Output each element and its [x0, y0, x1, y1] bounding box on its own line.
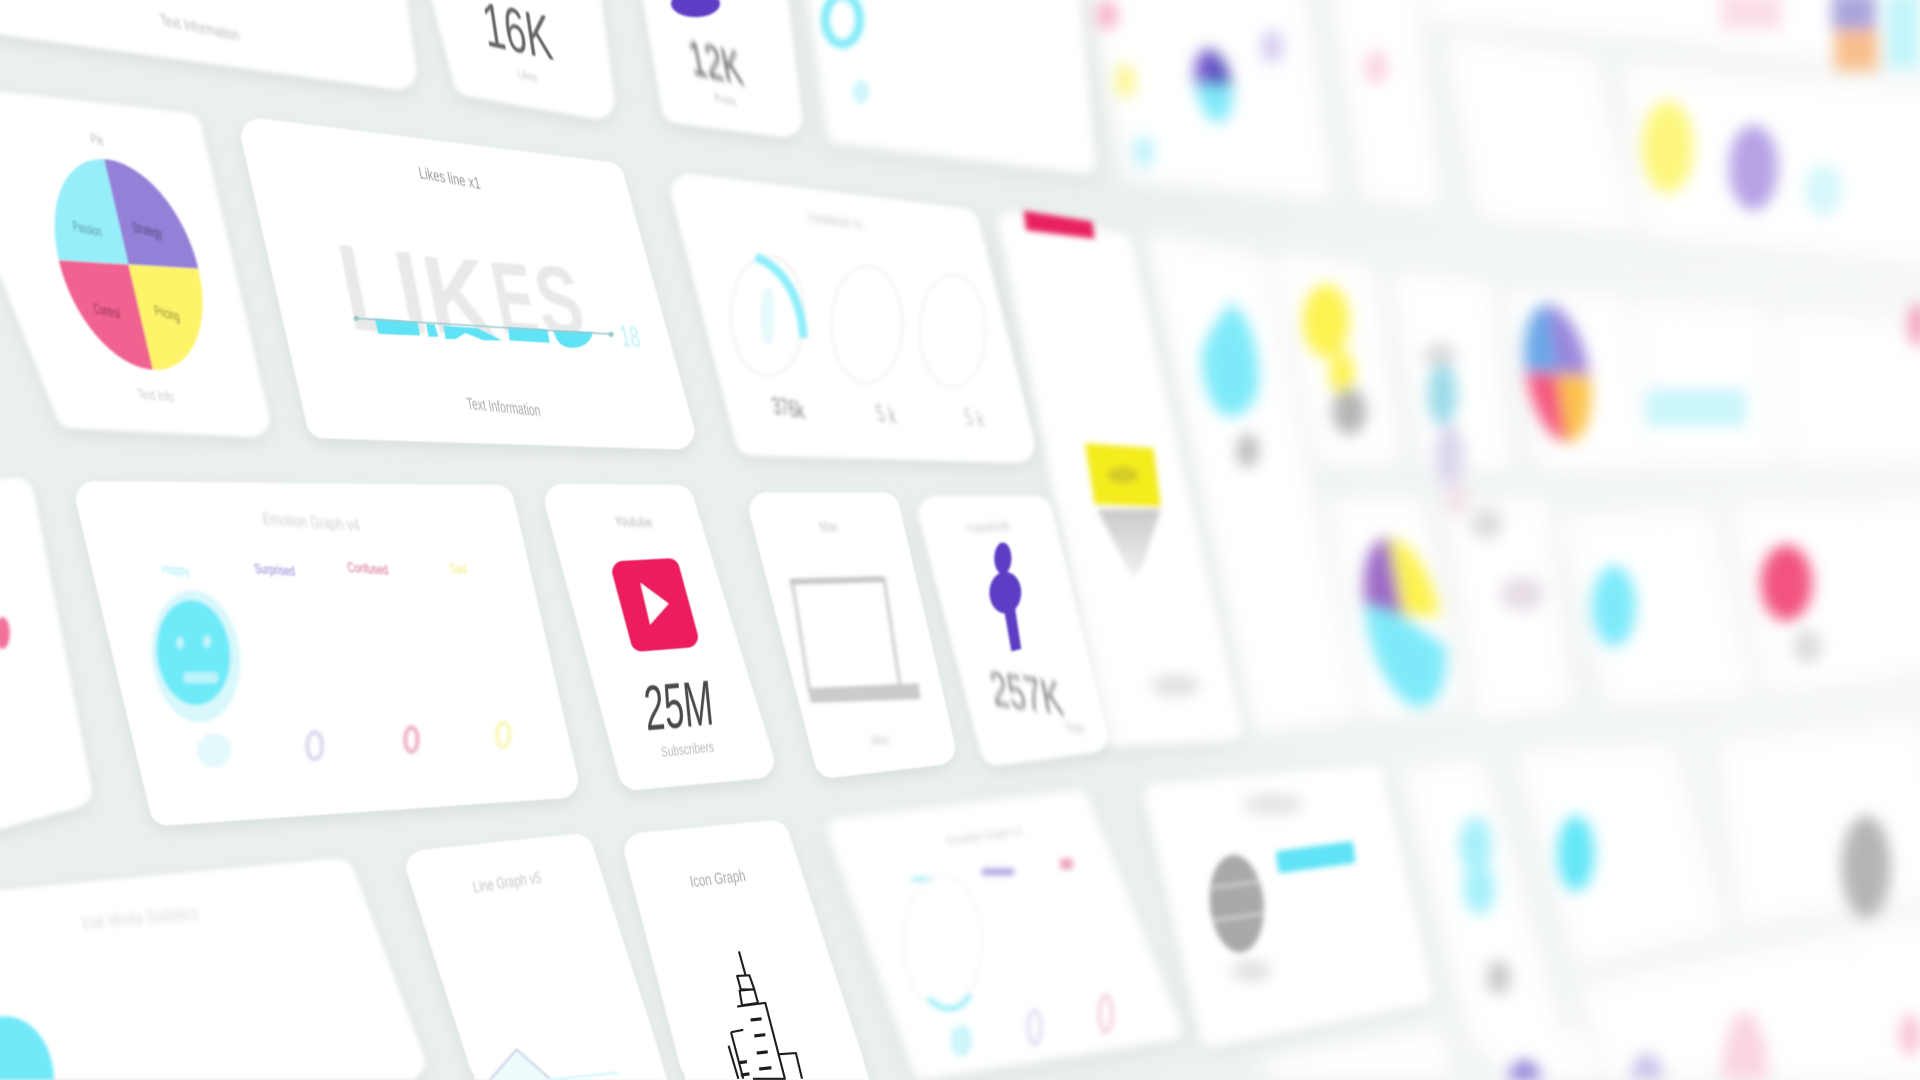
- 257K number: 257K: [985, 660, 1068, 726]
- cyan pill bar: [1278, 844, 1353, 871]
- ring charts: 376k: [770, 392, 807, 425]
- LIKES word: K: [414, 233, 502, 361]
- 12K caption: Posts: [713, 92, 738, 109]
- emotion legend: [160, 560, 468, 579]
- atmospheric wash over far cards: [1078, 0, 1920, 1080]
- 16K caption: Likes: [516, 67, 538, 85]
- top left caption: Text Information: [158, 10, 241, 44]
- likes card title: Likes line x1: [417, 163, 482, 193]
- pie chart: Pie: [89, 130, 105, 149]
- red label chip: [1024, 211, 1095, 239]
- emotion legend: Confused: [346, 560, 389, 578]
- emoji face: [145, 586, 247, 727]
- top ring icon: [825, 0, 869, 104]
- in-focus cards: [94, 137, 937, 1080]
- emotion graph v2 card content: Emotion Graph v1: [945, 822, 1024, 849]
- emotion graph title: Emotion Graph v4: [261, 509, 362, 536]
- card captions out of focus: Facebook: [966, 519, 1011, 536]
- ring charts: 5 k: [962, 403, 987, 434]
- small left card caption: Social Media Statistics: [67, 903, 200, 935]
- facebook icon: [989, 542, 1021, 651]
- subscribers caption: Subscribers: [660, 739, 715, 760]
- 25M number: 25M: [641, 666, 716, 744]
- LIKES word: E: [483, 241, 547, 359]
- card captions out of focus: [807, 209, 1086, 749]
- 12K number: 12K: [684, 30, 747, 96]
- mid blurred cards: [814, 0, 1420, 1068]
- likes caption: Text Information: [465, 395, 542, 420]
- yellow callout with grey tail: [1085, 443, 1161, 578]
- emotion legend: Happy: [160, 562, 191, 579]
- likes cyan bar: [375, 318, 593, 348]
- icon graph title: Icon Graph: [688, 866, 747, 891]
- left card pink fragment: [0, 617, 10, 649]
- pie chart: Pricing: [153, 302, 181, 325]
- card captions out of focus: Mac: [870, 731, 891, 749]
- line graph title: Line Graph v5: [471, 868, 543, 896]
- line graph chart: [490, 1049, 618, 1080]
- LIKES word: S: [526, 244, 592, 356]
- icon: youtube play button: [623, 569, 687, 640]
- emotion legend: Sad: [449, 561, 468, 577]
- emotion legend: Surprised: [253, 561, 296, 579]
- pie chart: Passion: [71, 217, 103, 241]
- LIKES word: I: [384, 225, 437, 359]
- soft blurred cards: [0, 0, 1090, 1080]
- pie chart: [34, 130, 223, 406]
- ring charts: [731, 256, 987, 434]
- likes line with end dots: [354, 316, 614, 337]
- far blurred chart colours: [1097, 0, 1920, 1080]
- far blurred card wall: [1093, 0, 1920, 1068]
- pie chart: Control: [92, 300, 122, 322]
- LIKES word: [328, 217, 592, 362]
- card captions out of focus: Total: [1063, 718, 1086, 737]
- icon: skyscraper: [729, 951, 802, 1079]
- emotion values: [197, 722, 509, 768]
- laptop title: Mac: [818, 518, 841, 535]
- youtube title: Youtube: [613, 512, 654, 531]
- likes value: 18: [617, 320, 643, 355]
- icon: laptop: [790, 579, 921, 703]
- globe icon: [1206, 853, 1268, 955]
- pie chart: Strategy: [130, 218, 165, 242]
- LIKES word: L: [328, 217, 409, 362]
- ring charts: 5 k: [874, 399, 899, 430]
- cyan circle: [0, 1016, 54, 1080]
- card captions out of focus: Facebook v1: [807, 209, 864, 233]
- emotion graph v2 card content: [904, 822, 1112, 1057]
- purple top blob: [671, 0, 720, 17]
- pie chart: Text Info: [136, 386, 175, 406]
